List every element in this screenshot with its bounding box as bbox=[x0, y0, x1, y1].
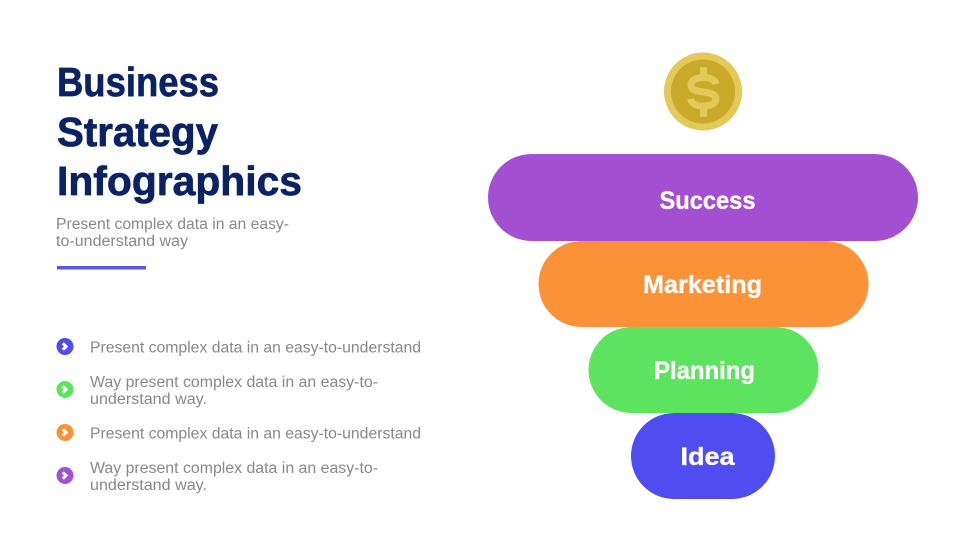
funnel tier: Planning: Planning bbox=[654, 357, 755, 385]
bullet 4: understand way. bbox=[90, 477, 207, 494]
bullet 4 bbox=[56, 460, 378, 494]
funnel tier: Marketing: Marketing bbox=[643, 271, 762, 299]
bullet 2: understand way. bbox=[90, 391, 207, 408]
bullet 2 bbox=[56, 374, 378, 408]
subtitle: Present complex data in an easy- bbox=[56, 216, 289, 233]
funnel tier: Idea: Idea bbox=[680, 443, 736, 471]
bullet 1: Present complex data in an easy-to-understand bbox=[90, 340, 421, 356]
bullet 2: Way present complex data in an easy-to- bbox=[90, 374, 378, 391]
bullet 3: Present complex data in an easy-to-understand bbox=[90, 426, 421, 442]
title: Infographics bbox=[57, 158, 302, 204]
title bbox=[57, 59, 302, 204]
accent underline bbox=[57, 266, 146, 270]
title: Strategy bbox=[57, 109, 218, 155]
bullet list bbox=[56, 338, 421, 494]
funnel tier: Idea bbox=[631, 413, 775, 499]
title: Business bbox=[57, 59, 219, 105]
subtitle: to-understand way bbox=[56, 233, 188, 250]
bullet 4: Way present complex data in an easy-to- bbox=[90, 460, 378, 477]
funnel tier: Success bbox=[488, 154, 918, 241]
funnel tier: Success: Success bbox=[660, 187, 756, 215]
subtitle bbox=[56, 216, 289, 250]
funnel tier: Planning bbox=[588, 327, 818, 413]
funnel tier: Marketing bbox=[538, 241, 868, 327]
icon: dollar coin bbox=[664, 52, 742, 130]
